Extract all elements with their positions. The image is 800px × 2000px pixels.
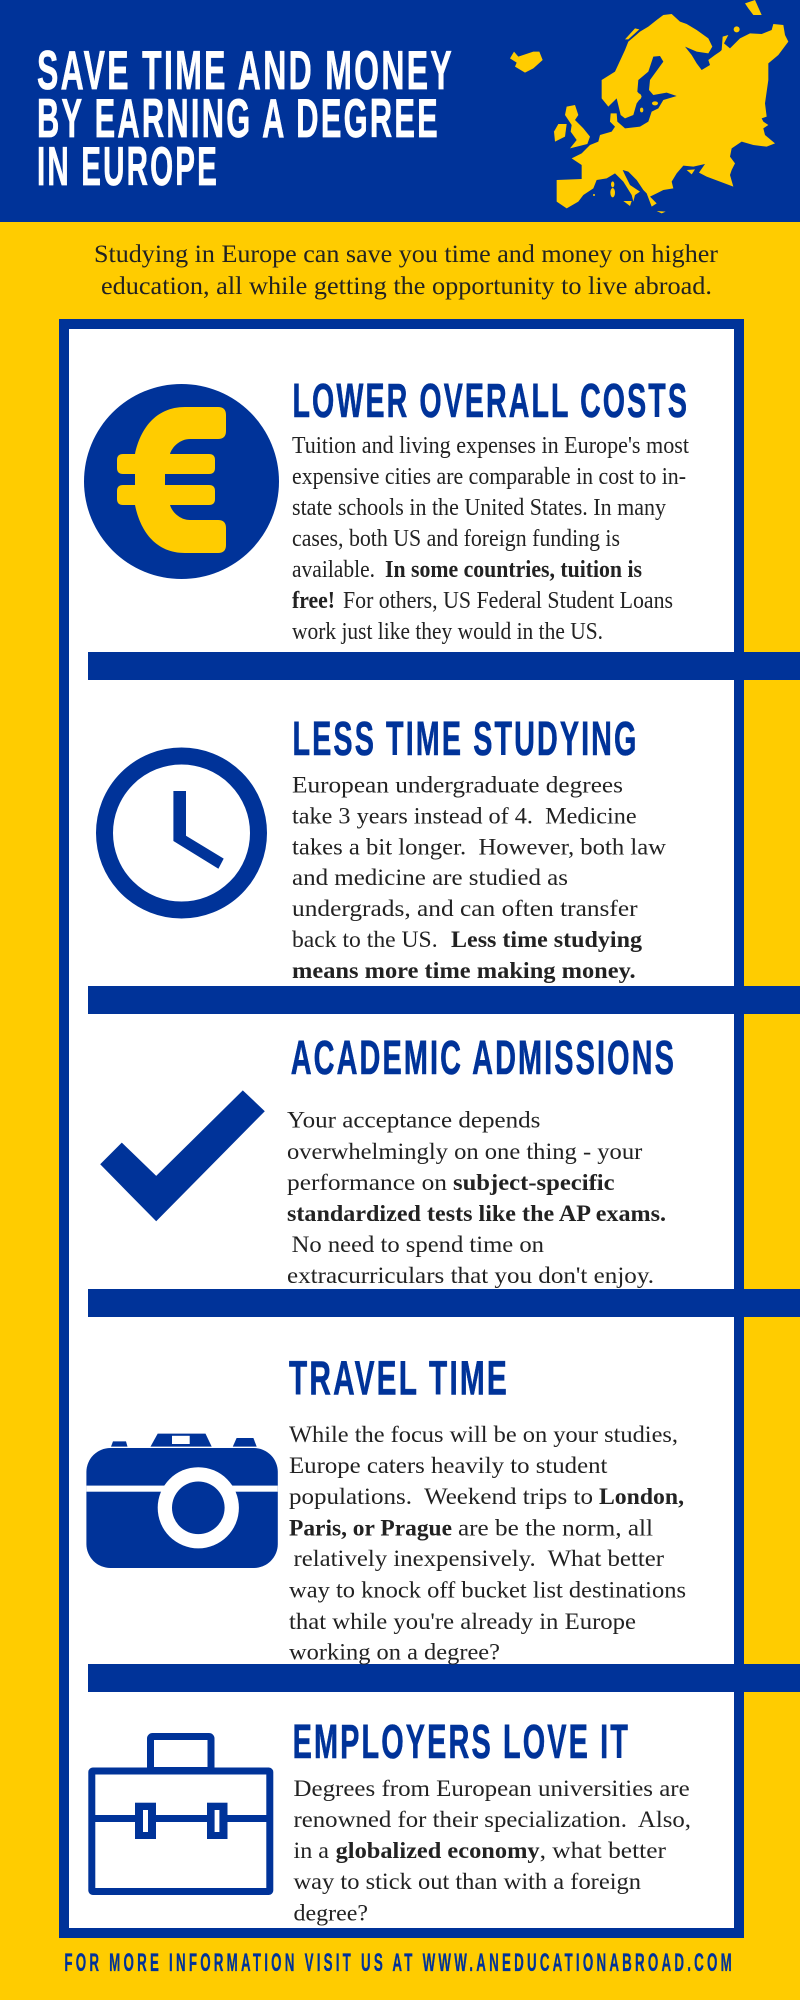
body text <box>289 1422 686 1666</box>
title: IN EUROPE <box>37 135 219 197</box>
body text: expensive cities are comparable in cost to in- <box>292 463 686 490</box>
panel: lower overall costs <box>84 375 689 645</box>
body text: Your acceptance depends <box>287 1108 540 1134</box>
body text: degree? <box>294 1901 368 1927</box>
icon: check mark <box>100 1090 265 1221</box>
body text: that while you're already in Europe <box>289 1609 636 1635</box>
body text: cases, both US and foreign funding is <box>292 525 620 552</box>
panel: less time studying <box>104 713 666 984</box>
body text: standardized tests like the AP exams. <box>287 1201 666 1227</box>
title: SAVE TIME AND MONEY <box>37 39 454 101</box>
body text: European undergraduate degrees <box>292 772 623 798</box>
panel: academic admissions <box>100 1032 676 1289</box>
body text: undergrads, and can often transfer <box>292 896 638 922</box>
body text: No need to spend time on <box>292 1232 544 1258</box>
body text: back to the US. <box>292 927 438 953</box>
body text: globalized economy <box>336 1838 540 1864</box>
body text: take 3 years instead of 4. Medicine <box>292 803 637 829</box>
body text: , what better <box>540 1838 666 1864</box>
body text: work just like they would in the US. <box>292 618 603 645</box>
body text: Less time studying <box>451 927 642 953</box>
body text: Paris, or Prague <box>289 1516 452 1542</box>
body text: Tuition and living expenses in Europe's most <box>292 432 689 459</box>
body text: relatively inexpensively. What better <box>294 1546 664 1572</box>
body text: way to stick out than with a foreign <box>294 1869 641 1895</box>
header band <box>0 0 800 222</box>
body text: state schools in the United States. In many <box>292 494 667 521</box>
body text <box>287 1108 666 1289</box>
intro text: education, all while getting the opportunity to live abroad. <box>101 273 712 300</box>
icon: clock <box>104 756 258 910</box>
title <box>37 39 454 197</box>
body text: Degrees from European universities are <box>294 1776 690 1802</box>
body text <box>292 772 666 984</box>
main panel frame <box>64 324 739 1933</box>
body text: in a <box>294 1838 330 1864</box>
icon: briefcase <box>91 1736 270 1892</box>
intro text: Studying in Europe can save you time and money on higher <box>94 241 719 268</box>
body text: are be the norm, all <box>458 1516 654 1542</box>
body text: means more time making money. <box>292 958 636 984</box>
heading: TRAVEL TIME <box>289 1353 509 1406</box>
body text: subject-specific <box>453 1170 615 1196</box>
icon: euro coin <box>84 384 279 579</box>
body text: working on a degree? <box>289 1640 500 1666</box>
body text: In some countries, tuition is <box>385 556 642 583</box>
panel: travel time <box>86 1353 686 1666</box>
intro text <box>94 241 719 300</box>
body text <box>292 432 689 645</box>
title: BY EARNING A DEGREE <box>37 87 440 149</box>
panel: employers love it <box>91 1716 691 1927</box>
body text: takes a bit longer. However, both law <box>292 834 666 860</box>
body text: performance on <box>287 1170 447 1196</box>
body text: For others, US Federal Student Loans <box>343 587 673 614</box>
icon: map of Europe <box>510 0 788 213</box>
body text: renowned for their specialization. Also, <box>294 1807 691 1833</box>
divider bars <box>88 652 800 1692</box>
body text: populations. Weekend trips to <box>289 1484 593 1510</box>
body text: free! <box>292 587 335 614</box>
body text: overwhelmingly on one thing - your <box>287 1139 642 1165</box>
body text: London, <box>599 1484 684 1510</box>
body text: extracurriculars that you don't enjoy. <box>287 1263 654 1289</box>
body text: and medicine are studied as <box>292 865 568 891</box>
body text: While the focus will be on your studies, <box>289 1422 678 1448</box>
body text: available. <box>292 556 375 583</box>
icon: camera <box>86 1434 278 1568</box>
body text: way to knock off bucket list destinations <box>289 1578 686 1604</box>
body text: Europe caters heavily to student <box>289 1453 608 1479</box>
body text <box>294 1776 691 1927</box>
